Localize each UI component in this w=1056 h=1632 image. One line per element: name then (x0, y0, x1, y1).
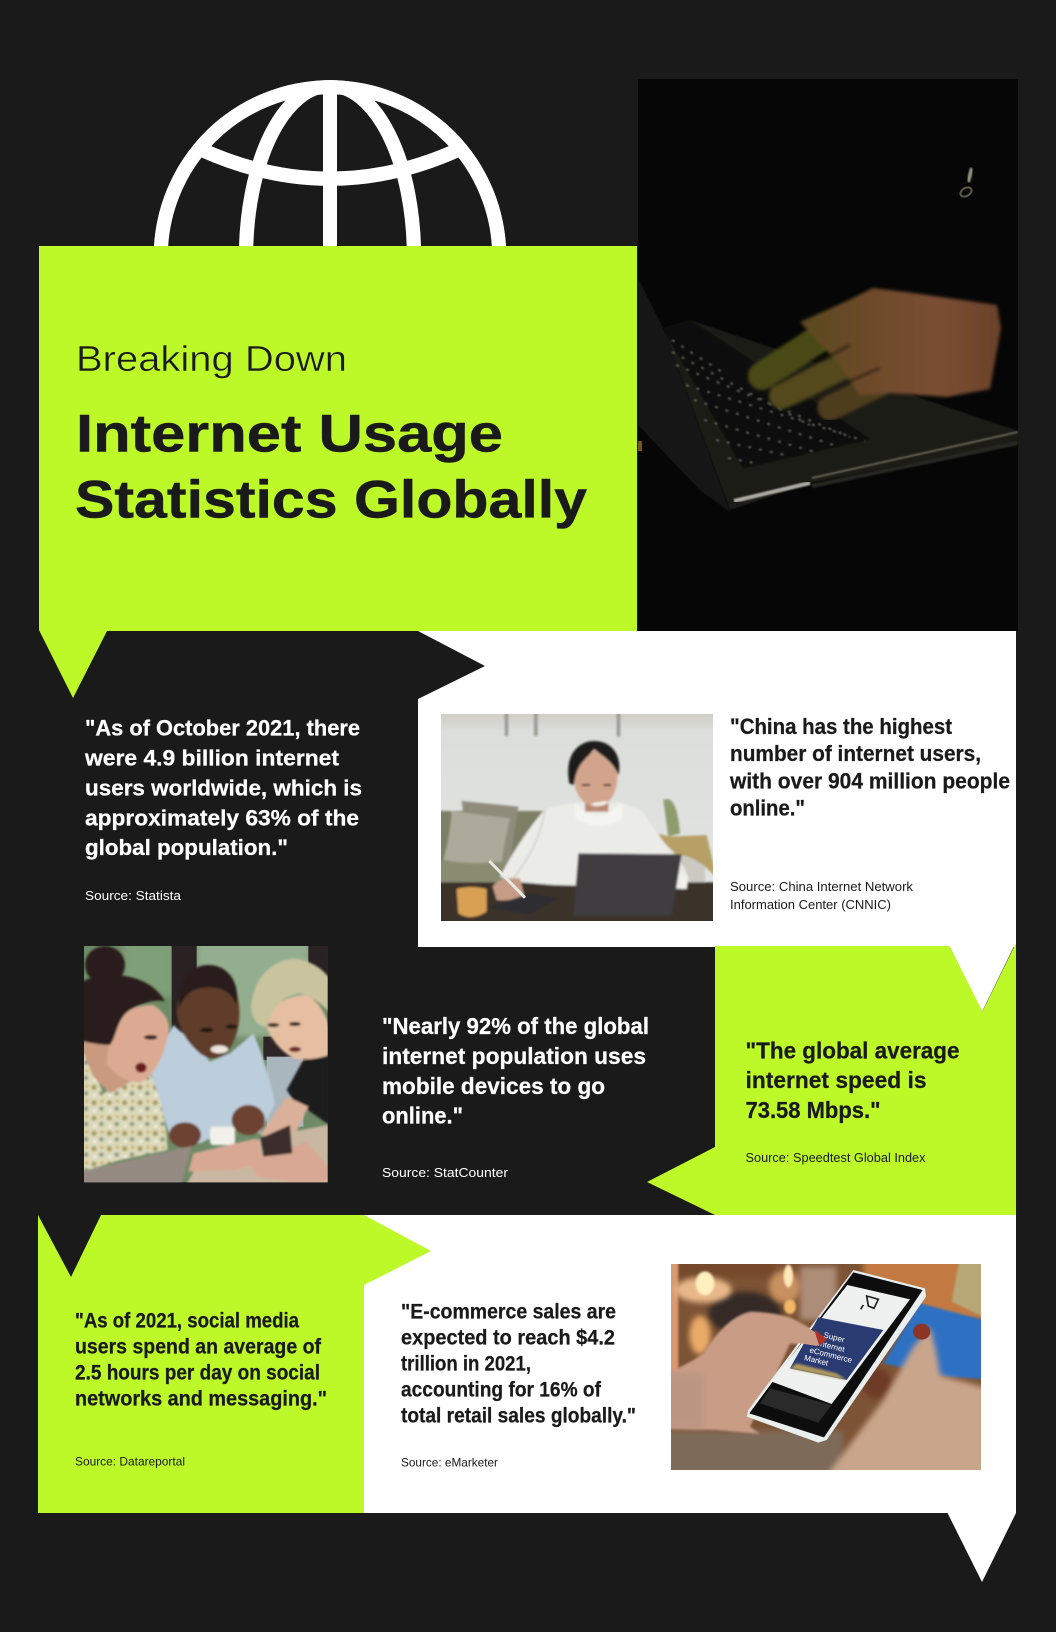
quote: speed: "The global average (746, 1038, 960, 1064)
heading: main title: Statistics Globally (75, 470, 588, 530)
phone screen text (804, 1332, 852, 1366)
quote: speed: 73.58 Mbps." (746, 1097, 880, 1123)
quote: china: online." (730, 796, 805, 820)
quote: internet users: approximately 63% of the (85, 806, 359, 830)
quote: social media: "As of 2021, social media (75, 1310, 299, 1332)
quote: china: "China has the highest (730, 714, 953, 739)
photo: friends with phone (84, 946, 328, 1182)
quote: mobile: internet population uses (382, 1043, 646, 1069)
quote: mobile (382, 1013, 649, 1128)
source: china: Source: China Internet Network (730, 879, 913, 894)
quote: e-commerce: accounting for 16% of (401, 1378, 602, 1402)
source: china: Information Center (CNNIC) (730, 897, 891, 912)
quote: internet users: were 4.9 billion internet (84, 746, 340, 770)
photo: phone shopping (671, 1264, 981, 1470)
phone screen text: Internet (817, 1339, 846, 1354)
heading: main title: Internet Usage (76, 404, 503, 464)
source: emarketer: Source: eMarketer (401, 1456, 498, 1470)
quote: mobile: online." (382, 1102, 463, 1128)
phone screen text: Super (823, 1331, 846, 1344)
quote: speed: internet speed is (746, 1067, 926, 1093)
source: datareportal: Source: Datareportal (75, 1454, 185, 1468)
quote: social media: 2.5 hours per day on social (75, 1362, 320, 1384)
photo: woman at laptop (433, 712, 720, 926)
heading: main title (75, 404, 588, 530)
quote: china: with over 904 million people (729, 768, 1010, 794)
panel: internet speed (647, 942, 1016, 1215)
quote: e-commerce: trillion in 2021, (401, 1352, 531, 1376)
panel: title (39, 246, 637, 698)
quote: e-commerce: expected to reach $4.2 (401, 1326, 615, 1350)
quote: mobile: "Nearly 92% of the global (382, 1013, 649, 1039)
quote: social media (75, 1310, 327, 1410)
quote: china (729, 714, 1010, 820)
source: statcounter: Source: StatCounter (382, 1165, 509, 1180)
source: speedtest: Source: Speedtest Global Index (746, 1150, 926, 1165)
photo: hand on laptop (638, 79, 1018, 631)
heading: breaking down: Breaking Down (76, 338, 347, 379)
quote: e-commerce: total retail sales globally." (401, 1404, 636, 1428)
quote: internet users: "As of October 2021, there (85, 716, 360, 740)
panel: social media (38, 1215, 431, 1513)
quote: social media: users spend an average of (75, 1336, 322, 1358)
icon: globe (154, 80, 506, 246)
panel: china (418, 631, 1016, 947)
source: china (730, 879, 913, 912)
quote: e-commerce (401, 1300, 636, 1428)
quote: e-commerce: "E-commerce sales are (401, 1300, 616, 1324)
quote: social media: networks and messaging." (75, 1388, 327, 1410)
quote: china: number of internet users, (730, 741, 981, 766)
quote: internet users: users worldwide, which is (85, 776, 362, 800)
quote: speed (746, 1038, 960, 1123)
panel: internet users (84, 716, 362, 903)
quote: internet users (84, 716, 362, 860)
panel: e-commerce (364, 1215, 1016, 1582)
source: statista: Source: Statista (85, 888, 182, 903)
panel: mobile (77, 940, 649, 1190)
phone screen text: eCommerce (809, 1346, 854, 1365)
quote: mobile: mobile devices to go (382, 1073, 605, 1099)
phone screen text: Market (803, 1353, 830, 1368)
quote: internet users: global population." (85, 835, 288, 860)
